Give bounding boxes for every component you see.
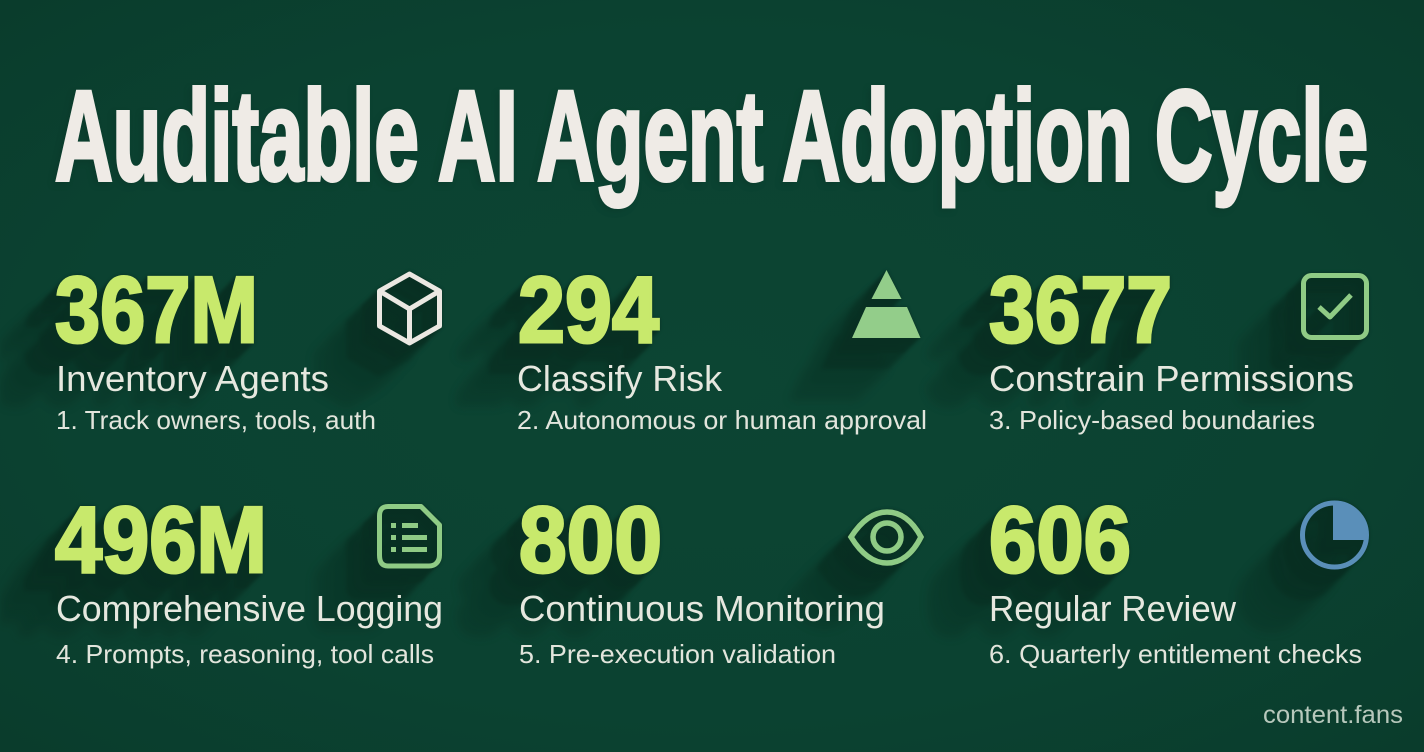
stat: 606: 606	[989, 487, 1131, 592]
icon: cube	[380, 274, 440, 343]
icon: eye	[851, 512, 921, 563]
icon: pie chart	[1302, 503, 1366, 567]
description: step 5: 5. Pre-execution validation	[519, 639, 836, 669]
panel: inventory agents	[55, 257, 440, 435]
description: step 4: 4. Prompts, reasoning, tool calls	[56, 639, 434, 669]
description: step 3: 3. Policy-based boundaries	[989, 405, 1315, 435]
label: classify risk: Classify Risk	[517, 358, 723, 399]
icon: log document	[380, 506, 440, 566]
description: step 2: 2. Autonomous or human approval	[517, 405, 927, 435]
icon: checkbox	[1304, 276, 1366, 338]
label: continuous monitoring: Continuous Monitoring	[519, 588, 885, 629]
stat: 3677: 3677	[989, 257, 1172, 362]
stat: 367M: 367M	[55, 257, 258, 362]
label: inventory agents: Inventory Agents	[56, 358, 329, 399]
panel: constrain permissions	[989, 257, 1366, 435]
watermark: content.fans	[1263, 701, 1403, 729]
description: step 6: 6. Quarterly entitlement checks	[989, 639, 1362, 669]
stat: 496M: 496M	[55, 487, 267, 592]
panel: regular review	[989, 487, 1366, 669]
label: comprehensive logging: Comprehensive Logging	[56, 588, 443, 629]
stat: 800: 800	[519, 487, 662, 592]
stat: 294: 294	[518, 257, 659, 362]
panel: classify risk	[517, 257, 927, 435]
panel: continuous monitoring	[519, 487, 921, 669]
label: regular review: Regular Review	[989, 588, 1237, 629]
label: constrain permissions: Constrain Permissions	[989, 358, 1354, 399]
description: step 1: 1. Track owners, tools, auth	[56, 405, 376, 435]
panel: comprehensive logging	[55, 487, 443, 669]
icon: pyramid	[852, 270, 920, 338]
